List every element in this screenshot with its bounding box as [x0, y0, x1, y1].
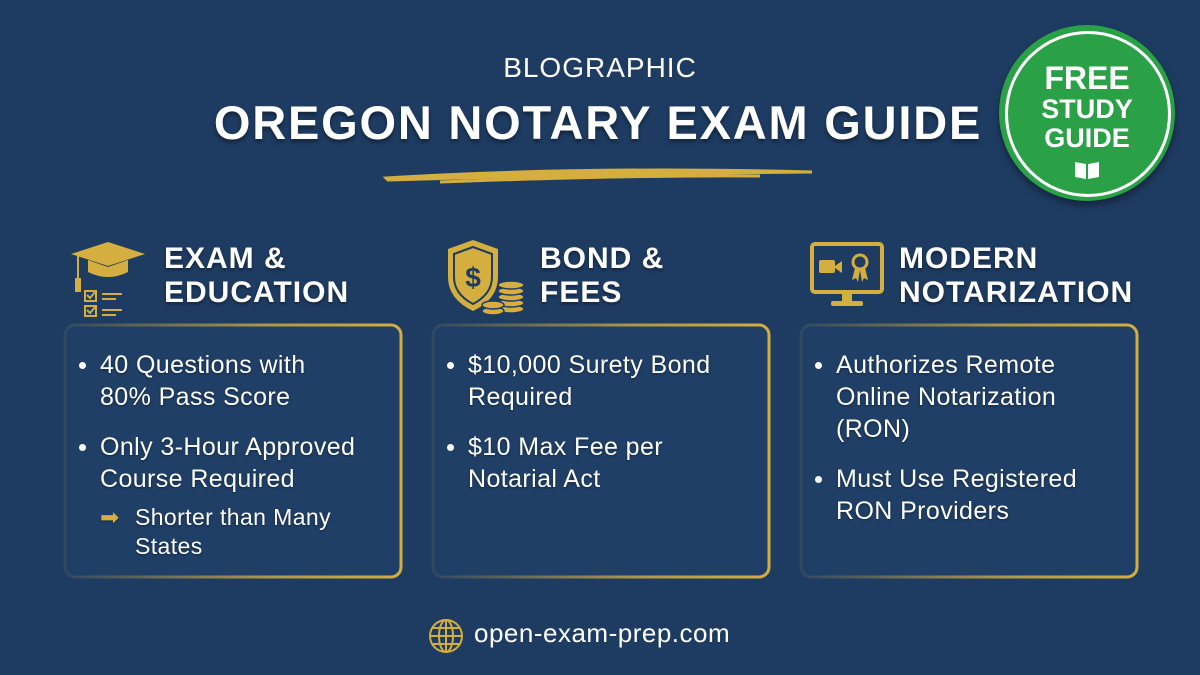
heading: EXAM & [164, 242, 287, 275]
bullets: ➡ [100, 504, 120, 530]
heading [164, 242, 349, 309]
icon: shield and coins: $ [465, 262, 481, 293]
icon: monitor with video and award [810, 242, 884, 306]
bullets: (RON) [836, 415, 910, 443]
section: exam & education [64, 242, 402, 578]
icon: graduation cap [71, 242, 145, 317]
bullets: $10,000 Surety Bond [468, 351, 710, 379]
bullets: Course Required [100, 465, 295, 493]
panel box [800, 324, 1138, 578]
heading: BOND & [540, 242, 664, 275]
title: OREGON NOTARY EXAM GUIDE [214, 96, 982, 149]
section: modern notarization [800, 242, 1138, 578]
icon: globe [429, 619, 463, 653]
bullets [79, 351, 355, 559]
badge: free study guide: GUIDE [1044, 123, 1130, 153]
panel box [432, 324, 770, 578]
bullets: RON Providers [836, 497, 1009, 525]
heading: FEES [540, 276, 622, 309]
heading: MODERN [899, 242, 1038, 275]
bullets: Notarial Act [468, 465, 601, 493]
subtitle: BLOGRAPHIC [503, 52, 697, 83]
footer: website: open-exam-prep.com [474, 618, 730, 648]
badge: free study guide: FREE [1044, 60, 1130, 96]
bullets: Required [468, 383, 573, 411]
bullets [447, 351, 710, 493]
bullets: 40 Questions with [100, 351, 306, 379]
bullets: States [135, 533, 203, 559]
heading [540, 242, 664, 309]
badge: free study guide: STUDY [1041, 94, 1133, 124]
bullets [815, 351, 1077, 525]
section: bond & fees [432, 240, 770, 578]
gold underline swoosh [382, 168, 812, 184]
heading: NOTARIZATION [899, 276, 1133, 309]
panel box [64, 324, 402, 578]
bullets: Must Use Registered [836, 465, 1077, 493]
icon: shield and coins [448, 240, 524, 314]
bullets: Authorizes Remote [836, 351, 1055, 379]
bullets: 80% Pass Score [100, 383, 290, 411]
bullets: $10 Max Fee per [468, 433, 663, 461]
badge: free study guide [999, 25, 1175, 201]
bullets: Only 3-Hour Approved [100, 433, 355, 461]
heading [899, 242, 1133, 309]
heading: EDUCATION [164, 276, 349, 309]
bullets: Online Notarization [836, 383, 1056, 411]
bullets: Shorter than Many [135, 504, 331, 530]
